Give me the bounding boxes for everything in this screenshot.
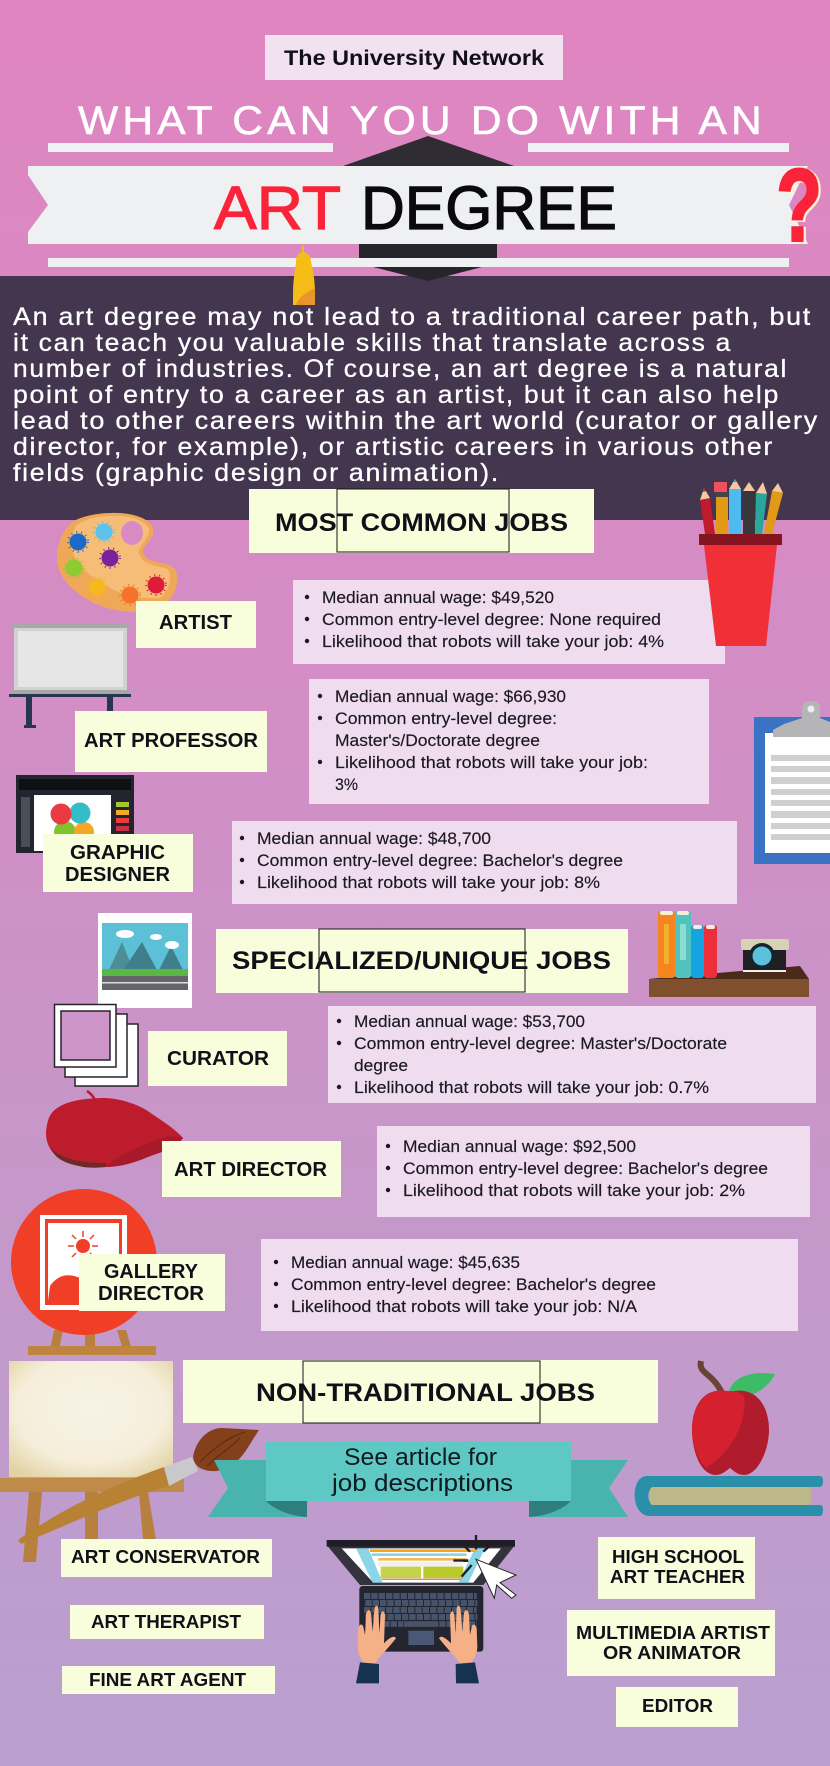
intro paragraph: it can teach you valuable skills that translate across a (13, 329, 732, 357)
label: curator: CURATOR (167, 1048, 270, 1070)
heading: specialized/unique jobs: SPECIALIZED/UNIQUE JOBS (232, 947, 611, 975)
info: art director: Likelihood that robots will take your job: 2% (403, 1181, 745, 1200)
info: graphic designer (232, 821, 737, 904)
icon: books and camera on shelf (649, 911, 809, 997)
icon: red circle with framed picture (11, 1189, 157, 1335)
label: editor: EDITOR (642, 1696, 713, 1716)
label: multimedia artist or animator: OR ANIMATOR (603, 1643, 741, 1663)
label: art director: ART DIRECTOR (174, 1159, 328, 1181)
panel: intro band (0, 276, 830, 520)
label: gallery director: DIRECTOR (98, 1283, 205, 1305)
icon: clipboard (754, 701, 830, 864)
intro paragraph: An art degree may not lead to a traditional career path, but (13, 303, 812, 331)
info: gallery director: Likelihood that robots will take your job: N/A (291, 1297, 638, 1316)
label: fine art agent: FINE ART AGENT (89, 1670, 246, 1690)
brand tag: The University Network (284, 47, 544, 70)
heading: non-traditional jobs (183, 1360, 658, 1423)
label: graphic designer: DESIGNER (65, 864, 171, 886)
intro paragraph: director, for example), or artistic careers in various other (13, 433, 774, 461)
heading: most common jobs: MOST COMMON JOBS (275, 509, 568, 537)
info: art director: Common entry-level degree: Bachelor's degree (403, 1159, 768, 1178)
label: multimedia artist or animator (567, 1610, 775, 1676)
info: gallery director: Common entry-level degree: Bachelor's degree (291, 1275, 656, 1294)
title banner: ART (214, 174, 341, 242)
label: art director (162, 1141, 341, 1197)
info: gallery director: Median annual wage: $45,635 (291, 1253, 520, 1272)
info: artist (293, 580, 725, 664)
heading: non-traditional jobs: NON-TRADITIONAL JOBS (256, 1379, 595, 1407)
label: artist (136, 601, 256, 648)
icon: beret (46, 1091, 183, 1168)
label: high school art teacher: ART TEACHER (610, 1567, 745, 1587)
intro paragraph: number of industries. Of course, an art degree is a natural (13, 355, 788, 383)
icon: design monitor (16, 775, 134, 853)
heading: specialized/unique jobs (216, 929, 628, 993)
icon: apple on book (635, 1361, 823, 1516)
ribbon: see article: See article for (344, 1444, 497, 1471)
intro paragraph: fields (graphic design or animation). (13, 459, 500, 487)
label: art therapist: ART THERAPIST (91, 1612, 241, 1632)
icon: laptop with hands (327, 1535, 516, 1683)
label: editor (616, 1687, 738, 1727)
icon: tassel (293, 245, 315, 305)
info: art professor: Common entry-level degree: (335, 709, 557, 728)
info: curator: Common entry-level degree: Master's/Doctorate (354, 1034, 727, 1053)
info: gallery director (261, 1239, 798, 1331)
info: art professor: Master's/Doctorate degree (335, 731, 540, 750)
info: curator: Median annual wage: $53,700 (354, 1012, 585, 1031)
info: artist: Common entry-level degree: None required (322, 610, 661, 629)
info: artist: Median annual wage: $49,520 (322, 588, 554, 607)
label: gallery director: GALLERY (104, 1261, 199, 1283)
label: high school art teacher: HIGH SCHOOL (612, 1547, 744, 1567)
ribbon: see article: job descriptions (331, 1470, 513, 1497)
info: graphic designer: Likelihood that robots will take your job: 8% (257, 873, 600, 892)
info: artist: Likelihood that robots will take your job: 4% (322, 632, 664, 651)
title: what can you do with an: WHAT CAN YOU DO WITH AN (78, 99, 766, 143)
label: art conservator: ART CONSERVATOR (71, 1547, 260, 1567)
info: curator: Likelihood that robots will take your job: 0.7% (354, 1078, 709, 1097)
label: art professor: ART PROFESSOR (84, 730, 259, 752)
heading: most common jobs (249, 489, 594, 553)
info: graphic designer: Median annual wage: $48,700 (257, 829, 491, 848)
info: art professor: Likelihood that robots will take your job: (335, 753, 648, 772)
label: gallery director (79, 1254, 225, 1311)
intro paragraph (13, 303, 819, 487)
label: curator (148, 1031, 287, 1086)
brand tag (265, 35, 563, 80)
icon: paint palette (57, 513, 177, 612)
label: fine art agent (62, 1666, 275, 1694)
info: art professor: 3% (335, 775, 358, 794)
icon: stacked frames (54, 1004, 138, 1086)
info: curator: degree (354, 1056, 408, 1075)
label: art professor (75, 711, 267, 772)
info: art director: Median annual wage: $92,500 (403, 1137, 636, 1156)
label: graphic designer (43, 834, 193, 892)
info: graphic designer: Common entry-level degree: Bachelor's degree (257, 851, 623, 870)
ribbon: see article (208, 1442, 628, 1517)
intro paragraph: lead to other careers within the art world (curator or gallery (13, 407, 819, 435)
icon: landscape photo (98, 913, 192, 1008)
info: art professor: Median annual wage: $66,930 (335, 687, 566, 706)
label: multimedia artist or animator: MULTIMEDIA ARTIST (576, 1623, 770, 1643)
info: curator (328, 1006, 816, 1103)
icon: easel with canvas and brush (0, 1330, 259, 1562)
icon: projector screen (9, 624, 131, 728)
label: high school art teacher (598, 1537, 755, 1599)
icon: pencil cup (699, 479, 783, 646)
label: graphic designer: GRAPHIC (70, 842, 165, 864)
title banner (28, 136, 808, 281)
label: art therapist (70, 1605, 264, 1639)
intro paragraph: point of entry to a career as an artist, but it can also help (13, 381, 780, 409)
label: artist: ARTIST (159, 612, 232, 634)
info: art professor (309, 679, 709, 804)
info: art director (377, 1126, 810, 1217)
label: art conservator (61, 1539, 272, 1577)
title banner: DEGREE (361, 174, 617, 242)
